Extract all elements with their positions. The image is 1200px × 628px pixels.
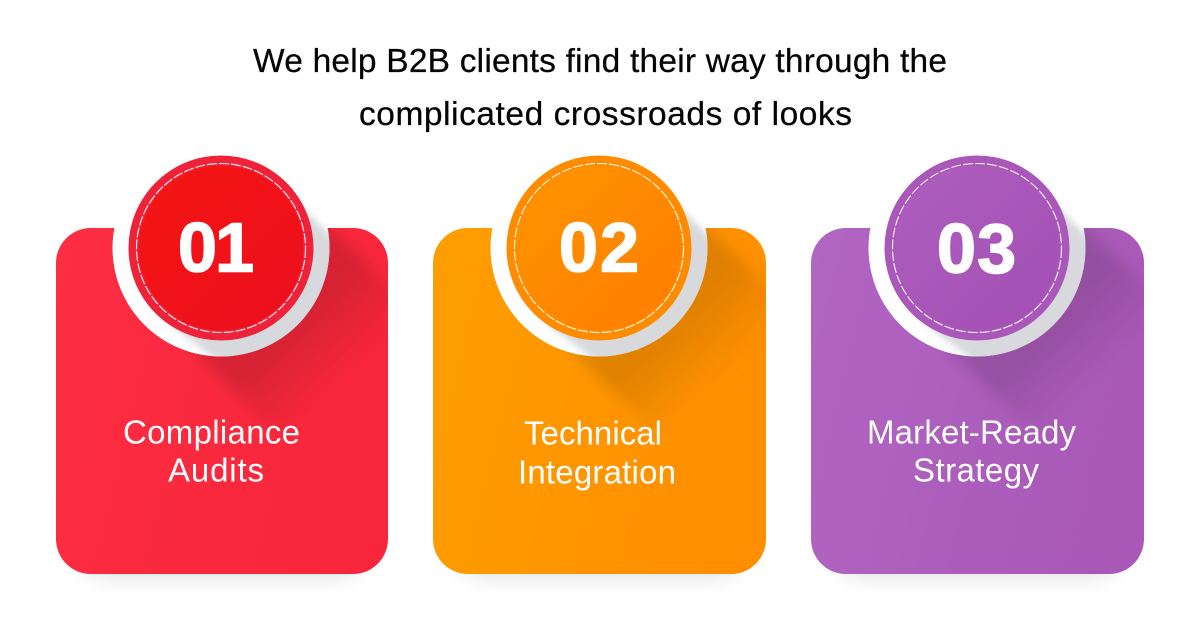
label: Market-Ready (867, 414, 1076, 450)
number badge 01 (128, 156, 314, 340)
label: Integration (518, 454, 676, 490)
label: Strategy (913, 452, 1040, 488)
label (867, 414, 1076, 488)
white notch with cast shadow (490, 204, 708, 356)
label (123, 414, 300, 488)
white notch with cast shadow (868, 204, 1086, 356)
title: We help B2B clients find their way through the (253, 43, 947, 80)
label: Audits (168, 452, 264, 488)
card: purple (811, 228, 1144, 583)
number badge 02 (506, 156, 692, 340)
number badge 03 (884, 156, 1070, 340)
label (518, 414, 676, 490)
label: Compliance (123, 414, 300, 450)
label: Technical (524, 414, 662, 452)
number badge 03: 03 (937, 210, 1016, 288)
panel: Compliance Audits (56, 156, 388, 583)
white notch with cast shadow (112, 204, 330, 356)
number badge 02: 02 (559, 208, 639, 286)
number badge 01: 01 (178, 208, 254, 286)
card: red (56, 228, 388, 583)
title: complicated crossroads of looks (359, 96, 852, 133)
panel: Technical Integration (433, 156, 766, 583)
card: orange (433, 228, 766, 583)
panel: Market-Ready Strategy (811, 156, 1144, 583)
title (253, 43, 947, 133)
